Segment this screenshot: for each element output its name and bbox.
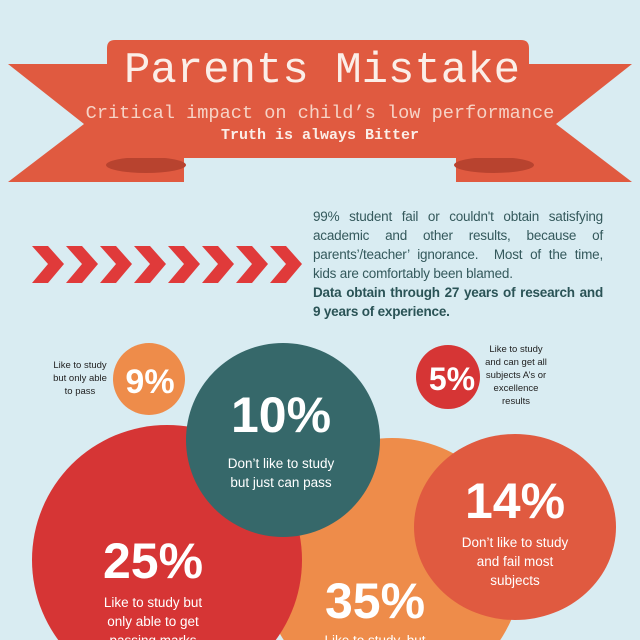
text block: description: 99% student fail or couldn't obtain satisfying academic and other results, because of parents’/teacher’ ignorance. Most of the time, kids are comfortably been blamed. <box>313 209 603 281</box>
circle: 5%: 5% <box>429 361 475 397</box>
circle: 25%: 25% <box>103 533 203 589</box>
arrow: chevrons <box>32 246 302 283</box>
label: 5%: and can get all <box>485 357 547 368</box>
circle: 14%: and fail most <box>477 554 554 569</box>
label: 9%: Like to study <box>53 360 107 371</box>
label: 9% <box>53 360 107 397</box>
circle: 35% <box>262 438 522 640</box>
circle: 14% <box>414 434 616 620</box>
circle: 9%: 9% <box>125 363 175 401</box>
text block: description: Data obtain through 27 years of research and 9 years of experience. <box>313 285 603 319</box>
subtitle: Critical impact on child’s low performance <box>86 103 554 124</box>
circle: 10%: Don’t like to study <box>228 456 335 471</box>
circle: 10%: but just can pass <box>230 475 332 490</box>
circle: 14%: subjects <box>490 573 540 588</box>
circle: 35%: 35% <box>325 573 425 629</box>
circle: 25%: Like to study but <box>104 595 202 610</box>
circle: 5% <box>416 345 480 409</box>
circle: 10%: 10% <box>231 387 331 443</box>
ribbon banner <box>8 40 632 182</box>
circle: 14%: 14% <box>465 473 565 529</box>
label: 9%: but only able <box>53 373 107 384</box>
circle: 9% <box>113 343 185 415</box>
circle: 14%: Don’t like to study <box>462 535 569 550</box>
circle: 10% <box>186 343 380 537</box>
label: 5%: Like to study <box>489 344 543 355</box>
label: 5%: results <box>502 396 530 407</box>
tagline: Truth is always Bitter <box>221 127 419 144</box>
text block: description <box>313 209 604 319</box>
circle: 25% <box>32 425 302 640</box>
label: 5%: excellence <box>494 383 538 394</box>
circle: 25%: only able to get <box>107 614 199 629</box>
label: 9%: to pass <box>65 386 96 397</box>
title: Parents Mistake <box>124 46 520 96</box>
label: 5% <box>485 344 547 407</box>
label: 5%: subjects A’s or <box>486 370 546 381</box>
